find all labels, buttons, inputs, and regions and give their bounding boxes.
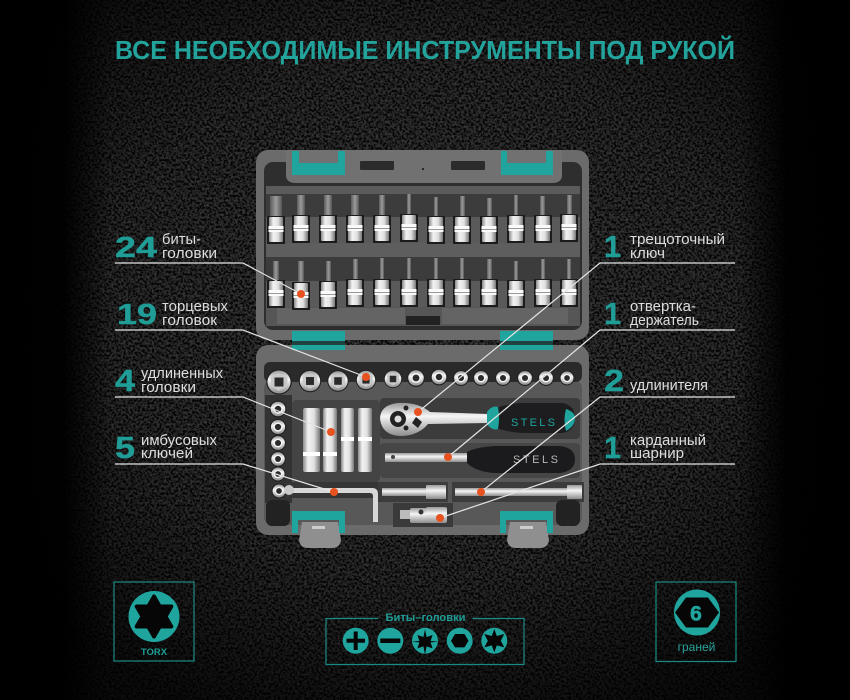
callout: 1 universal joint: 1	[604, 430, 621, 465]
callout: 4 deep sockets: удлиненных	[141, 366, 224, 382]
icon: phillips	[343, 628, 369, 654]
socket heads: left column	[270, 400, 286, 498]
panel: TORX badge	[114, 582, 194, 661]
callout: 1 screwdriver holder: отвертка-	[630, 299, 696, 315]
callout: 19 sockets: 19	[117, 299, 157, 331]
callout: 4 deep sockets: головки	[141, 380, 196, 396]
callout: 1 universal joint: карданный	[630, 433, 706, 449]
panel: six faces badge: граней	[678, 640, 715, 654]
panel: six faces badge: 6	[690, 602, 702, 626]
callout: 24 bits: головки	[162, 246, 217, 262]
callout: 5 hex keys: имбусовых	[141, 433, 218, 449]
callout: 5 hex keys: ключей	[141, 446, 193, 462]
callout: 2 extensions: 2	[604, 363, 624, 398]
callout: 24 bits	[115, 232, 217, 264]
socket heads: top row	[266, 368, 574, 395]
callout: 4 deep sockets: 4	[115, 363, 136, 398]
bottom row of bits	[267, 258, 578, 310]
panel: case lid with bits	[256, 150, 589, 340]
universal joint	[400, 507, 447, 523]
icon: teal hinges	[292, 331, 553, 350]
callout: 1 ratchet	[604, 229, 725, 264]
callout: 24 bits: 24	[115, 232, 157, 264]
teal base clips	[292, 511, 553, 533]
hex key	[284, 485, 378, 522]
panel: six faces badge	[656, 582, 736, 662]
screwdriver holder: STELS	[513, 454, 558, 466]
callout: 5 hex keys: 5	[115, 430, 135, 465]
callout: 24 bits: биты-	[162, 232, 201, 248]
icon: pozidriv	[411, 628, 439, 654]
callout: 1 ratchet: 1	[604, 229, 621, 264]
callout: 1 screwdriver holder	[604, 296, 699, 331]
callout: 5 hex keys	[115, 430, 218, 465]
callout: 19 sockets: торцевых	[162, 299, 229, 315]
callout: 1 screwdriver holder: держатель	[630, 313, 699, 329]
panel: bit types legend: Биты–головки	[386, 612, 466, 624]
ratchet wrench	[380, 403, 575, 436]
deep sockets	[303, 408, 372, 472]
top row of bits	[267, 194, 578, 244]
callout: 2 extensions: удлинителя	[630, 378, 708, 394]
panel: case base with tools	[256, 345, 589, 548]
callout: 19 sockets: головок	[162, 313, 218, 329]
callout: 4 deep sockets	[115, 363, 224, 398]
metal latches	[299, 522, 549, 548]
leader lines	[115, 263, 735, 518]
callout: 1 ratchet: ключ	[630, 246, 665, 262]
callout: 2 extensions	[604, 363, 708, 398]
panel: bit types legend	[326, 612, 524, 664]
icon: torx star	[481, 628, 507, 654]
callout: 1 universal joint	[604, 430, 706, 465]
title: ВСЕ НЕОБХОДИМЫЕ ИНСТРУМЕНТЫ ПОД РУКОЙ	[115, 35, 735, 65]
ratchet wrench: STELS	[511, 417, 555, 429]
callout: 1 ratchet: трещоточный	[630, 232, 725, 248]
callout: 1 universal joint: шарнир	[630, 446, 684, 462]
extension bar long	[455, 485, 582, 499]
teal lid clips	[292, 151, 553, 175]
icon: slotted	[377, 628, 403, 654]
panel: TORX badge: TORX	[141, 647, 168, 658]
screwdriver holder	[385, 446, 575, 473]
callout: 19 sockets	[117, 299, 229, 331]
callout: 1 screwdriver holder: 1	[604, 296, 621, 331]
icon: hex	[447, 628, 473, 654]
callout markers: orange dots	[297, 290, 485, 522]
extension bar short	[382, 485, 446, 499]
